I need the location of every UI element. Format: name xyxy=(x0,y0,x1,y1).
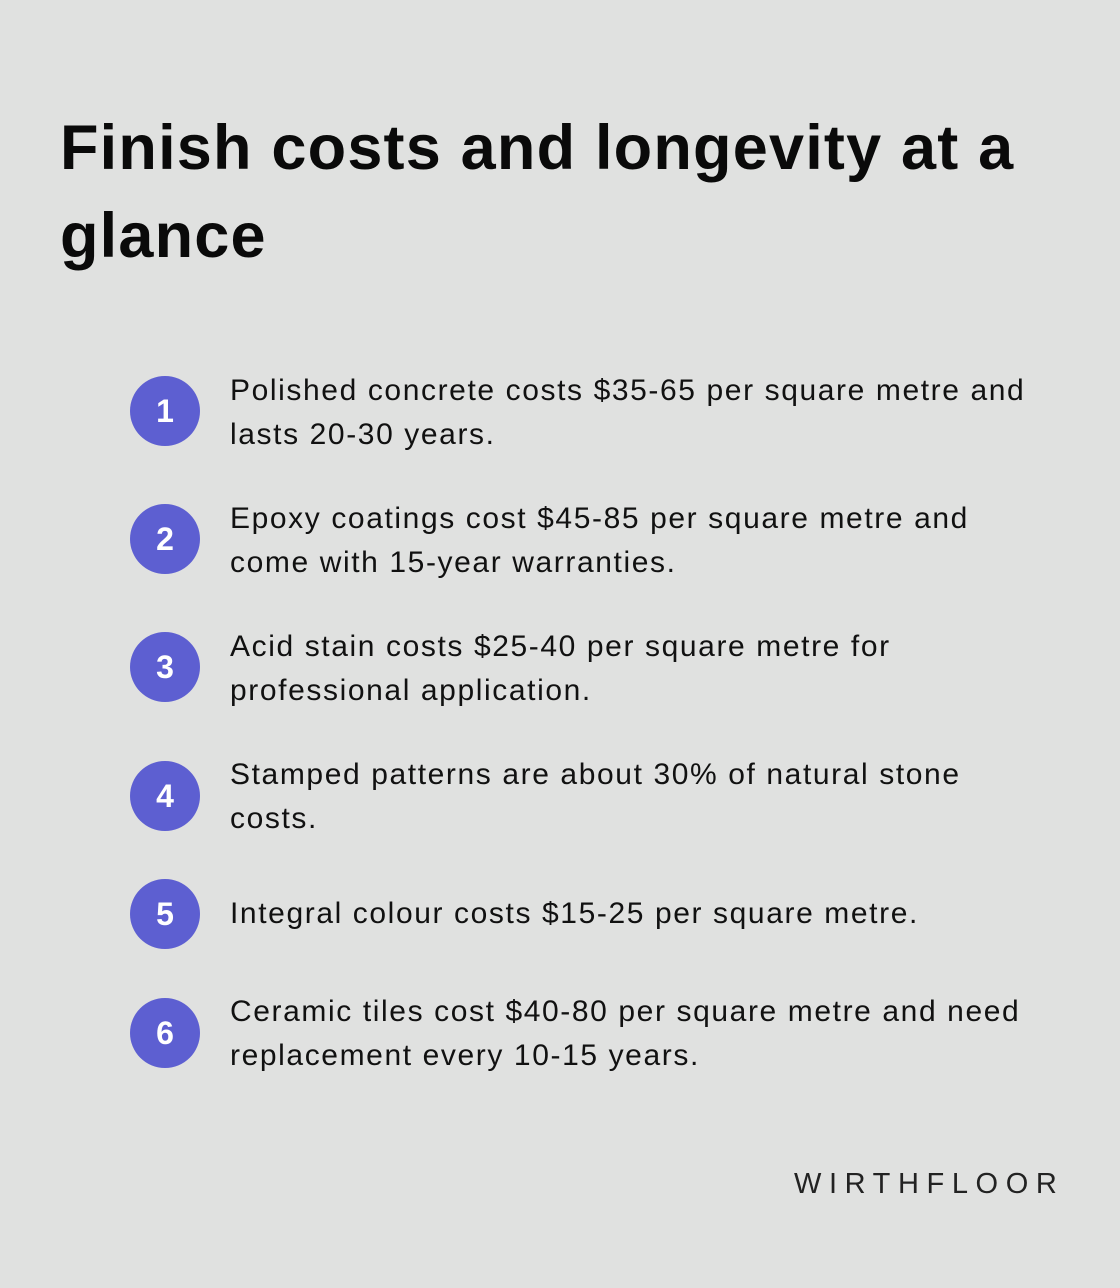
item 4 xyxy=(130,758,961,835)
text 3: professional application. xyxy=(230,674,592,707)
title xyxy=(60,113,1014,271)
text 1 xyxy=(230,374,1025,451)
text 2: Epoxy coatings cost $45-85 per square metre and xyxy=(230,502,969,535)
text 2: come with 15-year warranties. xyxy=(230,546,677,579)
icon: number 1 xyxy=(130,376,200,446)
icon: number 4 xyxy=(130,761,200,831)
item 5 xyxy=(130,879,919,949)
icon: number 3: 3 xyxy=(156,649,174,685)
logo: WIRTHFLOOR xyxy=(794,1168,1064,1200)
icon: number 5: 5 xyxy=(156,896,174,932)
icon: number 1: 1 xyxy=(156,393,174,429)
icon: number 3 xyxy=(130,632,200,702)
text 6: replacement every 10-15 years. xyxy=(230,1039,700,1072)
text 6: Ceramic tiles cost $40-80 per square metre and need xyxy=(230,995,1020,1028)
item 6 xyxy=(130,995,1020,1072)
icon: number 5 xyxy=(130,879,200,949)
text 1: Polished concrete costs $35-65 per square metre and xyxy=(230,374,1025,407)
text 1: lasts 20-30 years. xyxy=(230,418,496,451)
title: glance xyxy=(60,201,267,271)
title: Finish costs and longevity at a xyxy=(60,113,1014,183)
text 2 xyxy=(230,502,969,579)
item 1 xyxy=(130,374,1025,451)
text 4: costs. xyxy=(230,802,318,835)
icon: number 2: 2 xyxy=(156,521,174,557)
item 3 xyxy=(130,630,891,707)
icon: number 6 xyxy=(130,998,200,1068)
text 6 xyxy=(230,995,1020,1072)
text 3 xyxy=(230,630,891,707)
text 5: Integral colour costs $15-25 per square metre. xyxy=(230,897,919,930)
icon: number 2 xyxy=(130,504,200,574)
text 4: Stamped patterns are about 30% of natural stone xyxy=(230,758,961,791)
text 4 xyxy=(230,758,961,835)
icon: number 6: 6 xyxy=(156,1015,174,1051)
icon: number 4: 4 xyxy=(156,778,174,814)
text 3: Acid stain costs $25-40 per square metre for xyxy=(230,630,891,663)
item 2 xyxy=(130,502,969,579)
